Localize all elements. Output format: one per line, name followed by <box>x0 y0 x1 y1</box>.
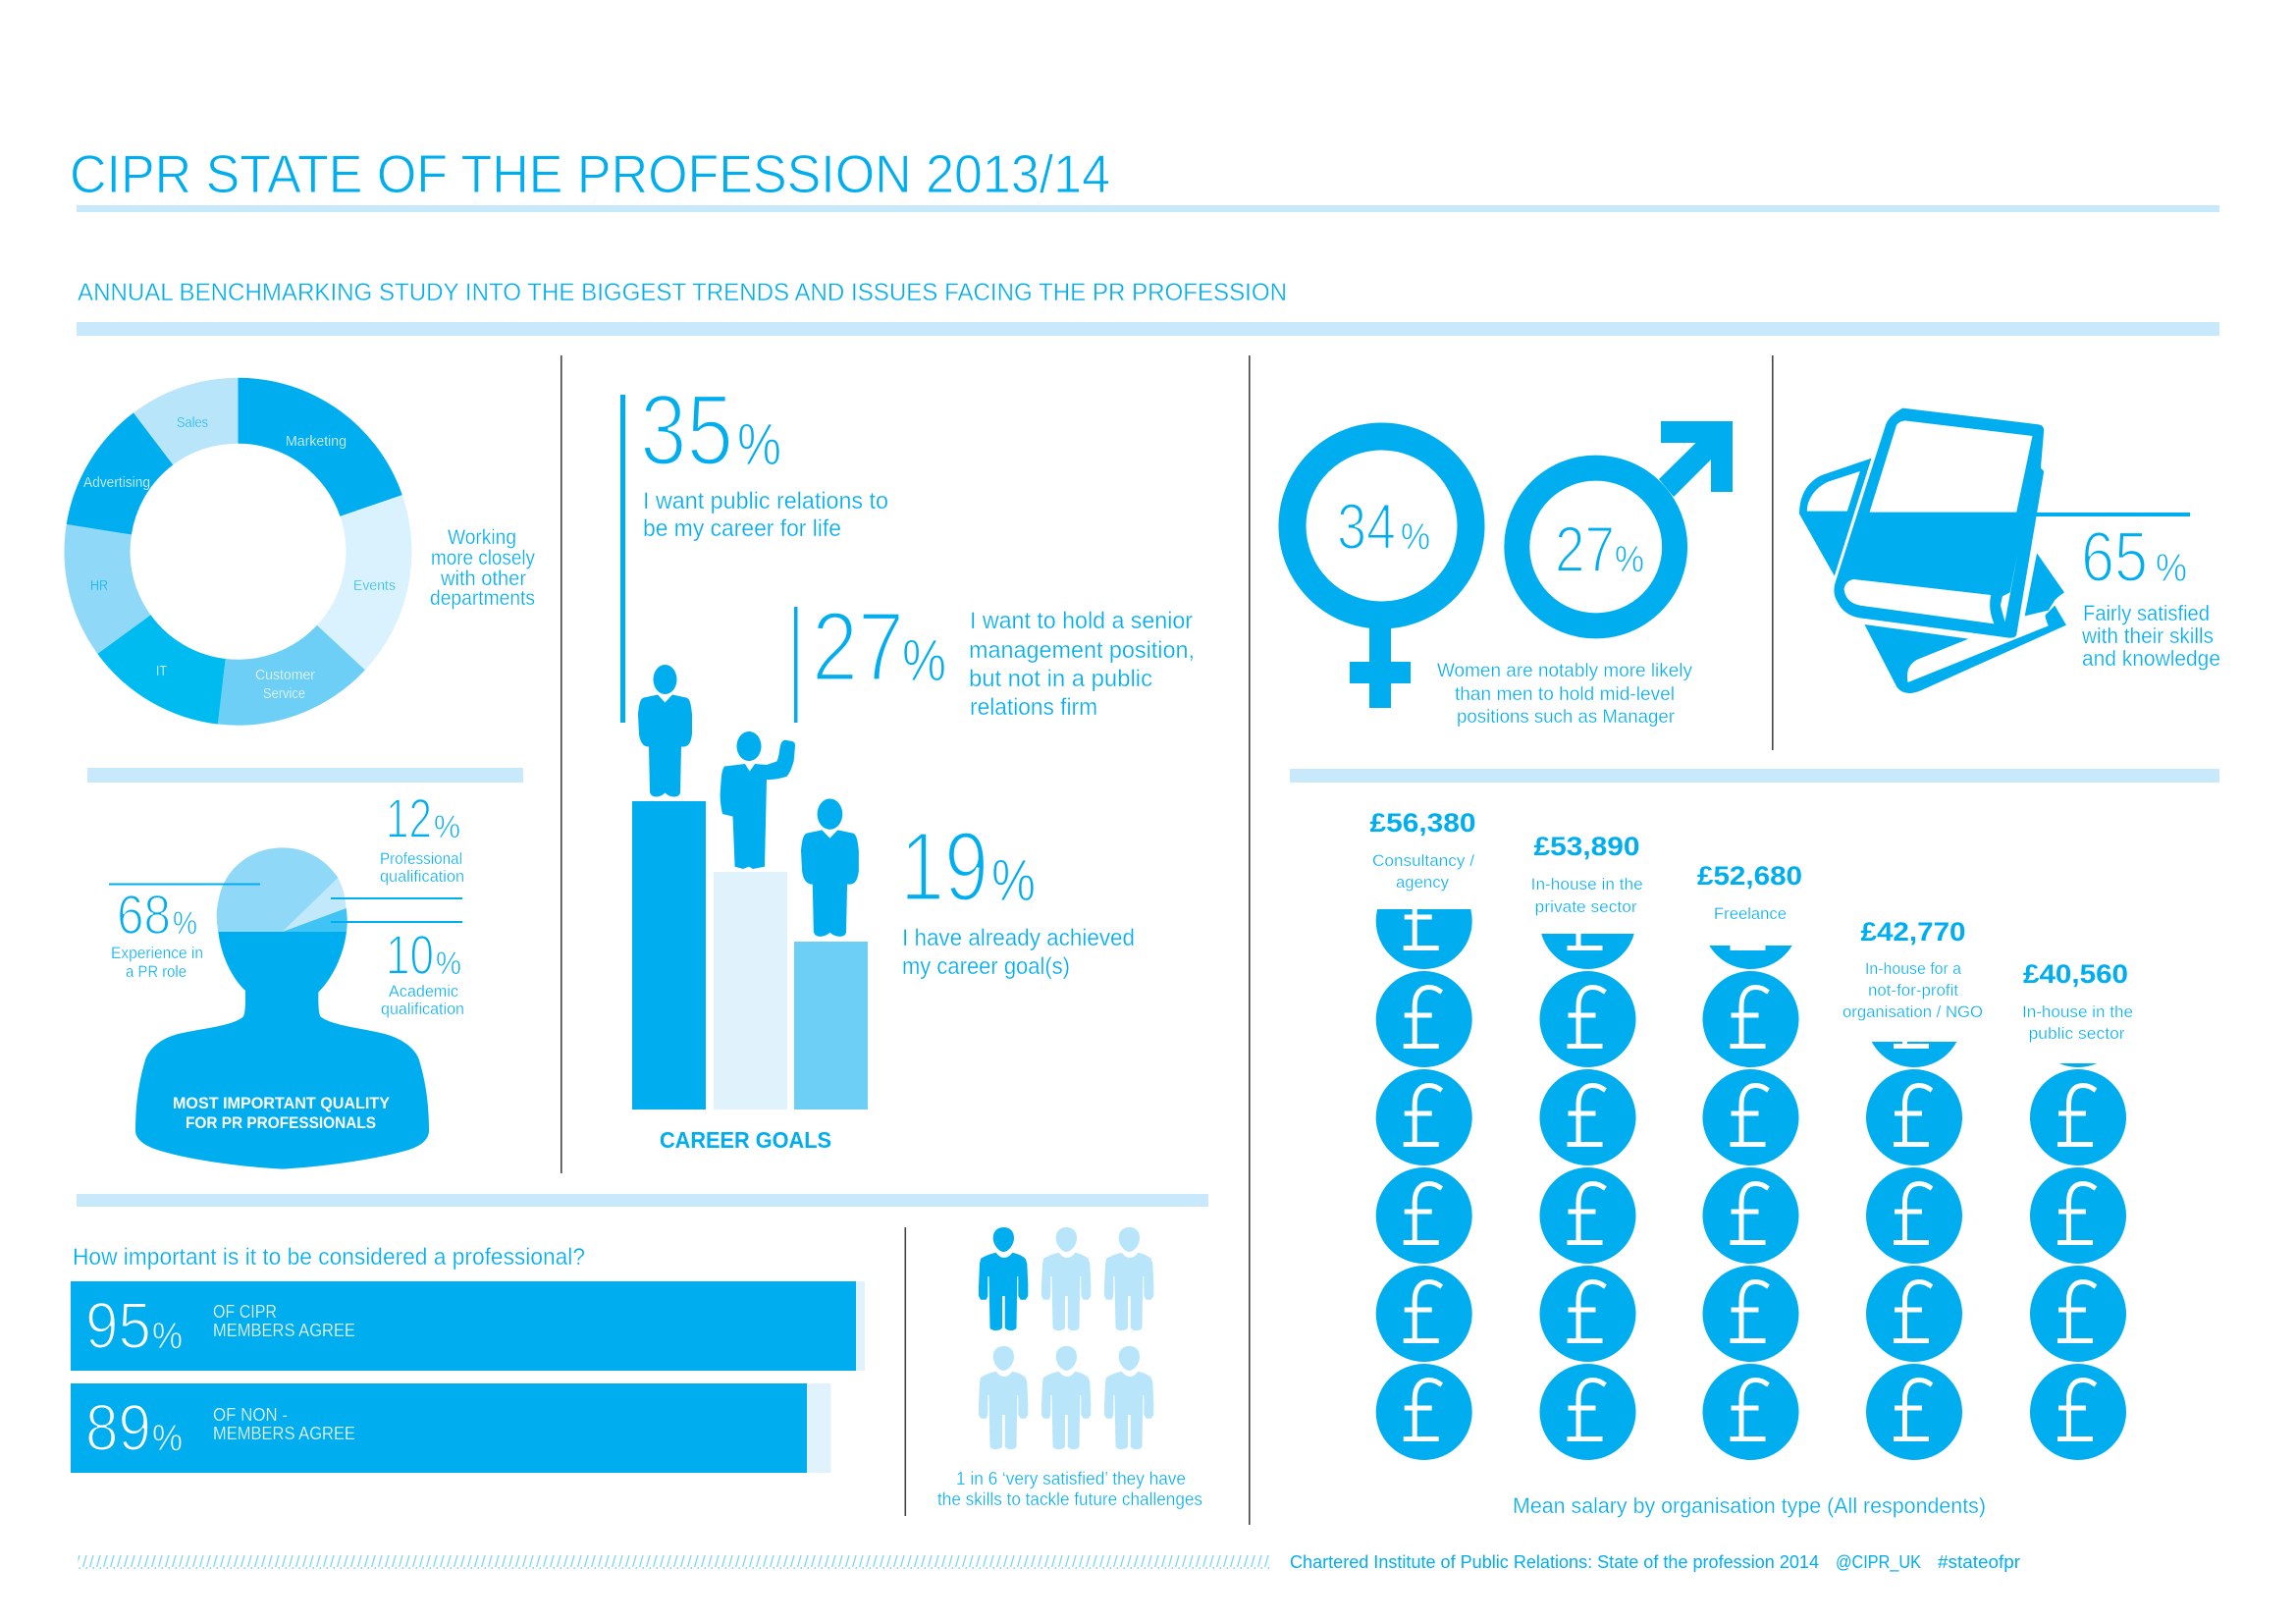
column: private sector: private sector <box>1535 897 1637 916</box>
donut labels <box>83 414 396 702</box>
stat: 68%: 68 <box>117 884 171 947</box>
panel: skills and knowledge <box>1799 408 2220 693</box>
gender caption: Women are notably more likely <box>1437 661 1692 681</box>
donut labels: Advertising <box>83 474 150 491</box>
column: consultancy: £56,380 <box>1370 808 1476 838</box>
stat: 27%: management position, <box>969 637 1195 664</box>
icon: light person 2 <box>1041 1227 1091 1330</box>
stat: 65%: and knowledge <box>2082 646 2220 671</box>
panel: career goals <box>620 374 1195 1153</box>
subtitle: ANNUAL BENCHMARKING STUDY INTO THE BIGGEST TRENDS AND ISSUES FACING THE PR PROFESSION <box>78 279 1287 306</box>
icon: books <box>1799 408 2066 693</box>
footer: @CIPR_UK <box>1836 1552 1921 1573</box>
people caption <box>937 1469 1202 1509</box>
figure on second podium <box>721 731 795 869</box>
bar: non-members 89%: OF NON - <box>213 1405 288 1425</box>
gender caption: positions such as Manager <box>1457 707 1676 728</box>
bar: CIPR members 95%: MEMBERS AGREE <box>213 1321 355 1340</box>
subtitle <box>77 279 2219 336</box>
donut labels: Customer <box>255 667 315 683</box>
donut segments <box>64 378 411 726</box>
column: public sector: In-house in the <box>2022 1002 2133 1021</box>
title: CIPR STATE OF THE PROFESSION 2013/14 <box>70 143 1110 204</box>
salary caption: Mean salary by organisation type (All respondents) <box>1513 1493 1986 1518</box>
stat: 68%: a PR role <box>126 962 187 981</box>
stat: 19% <box>900 812 1135 980</box>
panel: mean salary <box>1290 769 2219 1518</box>
stat: 68%: Experience in <box>111 944 203 962</box>
footer <box>1290 1552 2020 1573</box>
stat: 19%: 19 <box>900 812 988 922</box>
stat: men 27%: % <box>1615 539 1644 580</box>
column: private sector <box>1531 832 1643 1460</box>
panel: gender <box>1292 421 1733 728</box>
column: consultancy <box>1370 808 1476 1460</box>
stat: 19%: % <box>991 847 1036 913</box>
icon: male symbol <box>1517 421 1733 625</box>
column: freelance: £52,680 <box>1697 861 1802 891</box>
head silhouette with pie <box>135 847 429 1169</box>
donut caption <box>430 526 535 610</box>
stat: 65%: 65 <box>2081 518 2148 597</box>
column: consultancy: agency <box>1396 873 1449 892</box>
column: consultancy: Consultancy / <box>1372 851 1474 870</box>
stat: 68%: % <box>173 905 197 941</box>
donut caption: Working <box>448 526 516 549</box>
column: private sector: In-house in the <box>1531 875 1643 893</box>
figure on first podium <box>638 665 692 796</box>
bar: non-members 89%: 89 <box>85 1391 151 1465</box>
donut caption: more closely <box>431 547 535 569</box>
donut labels: Sales <box>177 414 208 431</box>
donut labels: Events <box>353 577 396 594</box>
bar: CIPR members 95%: OF CIPR <box>213 1302 277 1322</box>
bar: CIPR members 95% <box>71 1281 865 1371</box>
column: not-for-profit: £42,770 <box>1861 917 1965 947</box>
stat: 12%: % <box>434 809 460 844</box>
footer: Chartered Institute of Public Relations: State of the profession 2014 <box>1290 1552 1819 1572</box>
bar: CIPR members 95%: % <box>152 1316 183 1357</box>
stat: 10% <box>381 924 464 1018</box>
stat: women 34%: 34 <box>1337 490 1396 563</box>
bar: non-members 89% <box>71 1383 830 1473</box>
stat: 35%: I want public relations to <box>643 488 888 514</box>
column: public sector: public sector <box>2029 1024 2125 1043</box>
stat: 27% <box>794 592 1195 723</box>
panel: professional importance <box>71 1194 1208 1473</box>
bar: 19 percent podium <box>794 942 868 1110</box>
column: not-for-profit: not-for-profit <box>1868 981 1958 1000</box>
stat: 10%: 10 <box>386 924 434 987</box>
icon: light person 6 <box>1104 1346 1153 1449</box>
heading: How important is it to be considered a professional? <box>73 1244 585 1271</box>
donut caption: with other <box>440 568 526 590</box>
people caption: the skills to tackle future challenges <box>937 1489 1202 1509</box>
stat: 27%: relations firm <box>970 694 1097 721</box>
bar: non-members 89%: % <box>152 1418 183 1459</box>
label on shoulders: MOST IMPORTANT QUALITY <box>173 1094 391 1112</box>
column: public sector <box>2022 959 2133 1460</box>
chart title: CAREER GOALS <box>660 1127 831 1153</box>
stat: 35%: be my career for life <box>643 515 841 542</box>
column: freelance: Freelance <box>1714 904 1787 923</box>
stat: 65%: with their skills <box>2081 623 2214 648</box>
stat: 27%: % <box>902 627 946 693</box>
panel: most important quality <box>87 768 523 1169</box>
icon: light person 4 <box>979 1346 1028 1449</box>
stat: 10%: % <box>436 946 461 981</box>
stat: men 27%: 27 <box>1555 513 1615 585</box>
column: freelance <box>1697 861 1802 1460</box>
stat: 27%: 27 <box>812 592 904 702</box>
footer: #stateofpr <box>1938 1552 2020 1572</box>
bar: CIPR members 95%: 95 <box>85 1289 151 1363</box>
label on shoulders <box>173 1094 391 1132</box>
stat: 27%: but not in a public <box>969 666 1152 692</box>
label on shoulders: FOR PR PROFESSIONALS <box>186 1113 376 1132</box>
stat: 68% <box>111 884 203 981</box>
people caption: 1 in 6 ‘very satisfied’ they have <box>956 1469 1186 1489</box>
donut labels: Marketing <box>286 433 347 450</box>
figure on third podium <box>801 798 859 937</box>
icon: female symbol <box>1292 436 1470 708</box>
bar: 27 percent podium <box>714 872 787 1110</box>
stat: 10%: Academic <box>389 982 458 1001</box>
stat: 12% <box>380 787 464 886</box>
stat: 65%: Fairly satisfied <box>2083 601 2210 625</box>
donut labels: IT <box>156 663 167 679</box>
donut labels: Service <box>263 685 305 702</box>
panel: 1 in 6 very satisfied <box>937 1227 1202 1509</box>
column: not-for-profit <box>1842 917 1983 1460</box>
bar: non-members 89%: MEMBERS AGREE <box>213 1424 355 1443</box>
stat: 19%: my career goal(s) <box>902 953 1070 980</box>
stat: 12%: qualification <box>380 867 464 886</box>
icon: light person 3 <box>1104 1227 1153 1330</box>
stat: 65%: % <box>2156 547 2187 590</box>
stat: 35%: % <box>737 411 781 477</box>
icon: light person 5 <box>1041 1346 1091 1449</box>
icon: dark person <box>979 1227 1028 1330</box>
donut caption: departments <box>430 587 535 610</box>
stat: women 34%: % <box>1401 516 1430 558</box>
donut labels: HR <box>90 577 108 594</box>
column: not-for-profit: In-house for a <box>1865 959 1962 978</box>
column: public sector: £40,560 <box>2023 959 2128 989</box>
stat: 65% <box>2081 518 2220 671</box>
stat: 12%: Professional <box>380 849 462 868</box>
column: not-for-profit: organisation / NGO <box>1842 1002 1983 1021</box>
stat: 10%: qualification <box>381 1000 464 1018</box>
stat: 27%: I want to hold a senior <box>970 608 1193 634</box>
bar: 35 percent podium <box>632 801 706 1110</box>
column: private sector: £53,890 <box>1533 832 1639 861</box>
gender caption <box>1437 661 1692 728</box>
stat: 35%: 35 <box>640 374 733 486</box>
stat: 35% <box>620 374 888 723</box>
title <box>70 143 2219 212</box>
gender caption: than men to hold mid-level <box>1455 684 1675 705</box>
stat: 19%: I have already achieved <box>902 925 1135 951</box>
stat: 12%: 12 <box>386 787 432 850</box>
panel: departments donut chart <box>64 378 535 726</box>
